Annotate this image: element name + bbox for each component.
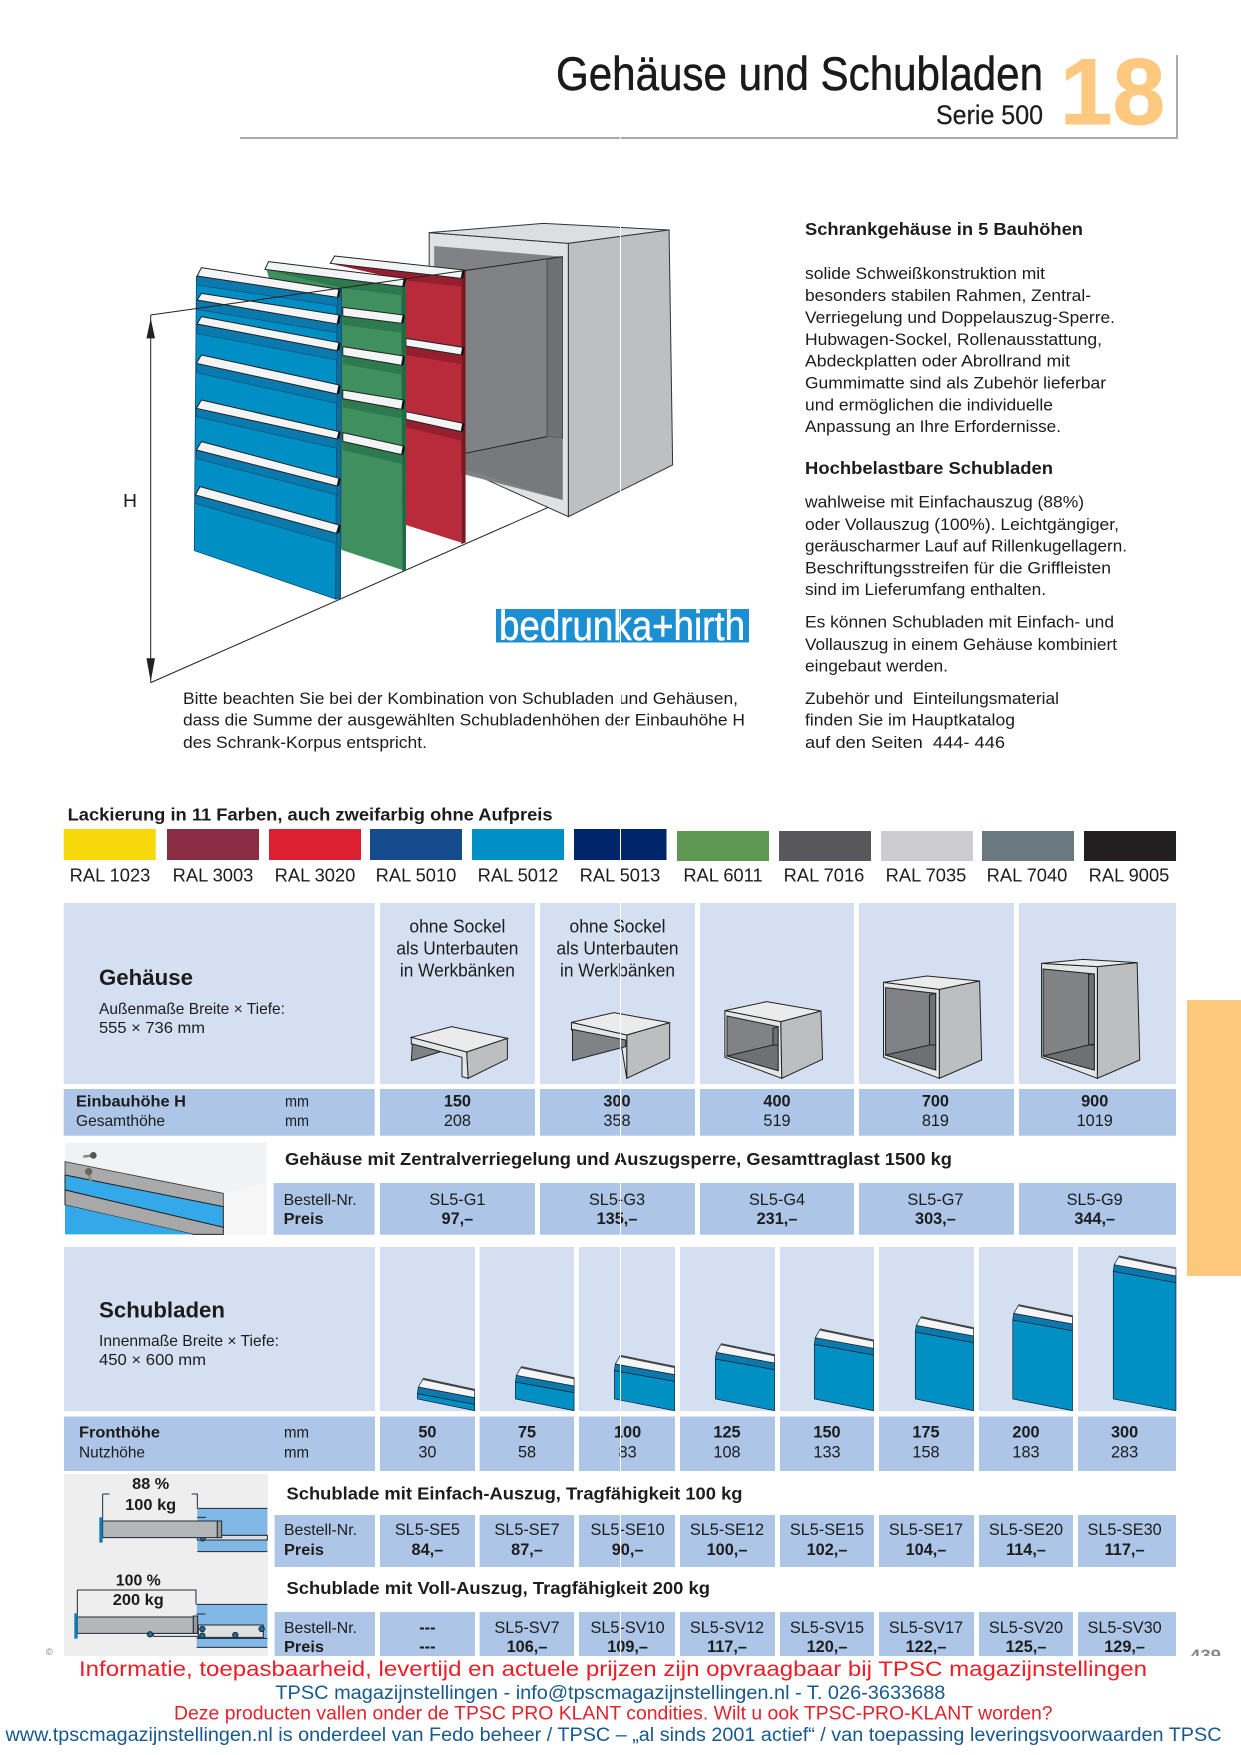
icon: housing 400	[725, 1002, 823, 1078]
note about drawer combination: des Schrank-Korpus entspricht.	[183, 733, 427, 752]
panel: drawer table	[64, 1247, 1176, 1656]
icon: drawer 175	[915, 1317, 974, 1411]
housing height row: 1019	[1077, 1112, 1113, 1130]
housing order row: SL5-G9	[1067, 1191, 1123, 1209]
label: 100 % 200 kg: 100 %	[116, 1573, 161, 1590]
housing height row: 700	[922, 1093, 949, 1111]
housing order row: 97,–	[442, 1210, 473, 1228]
drawer height row: 300	[1111, 1424, 1138, 1442]
single extension order row: Bestell-Nr.	[284, 1522, 357, 1539]
icon: housing 150	[411, 1027, 507, 1078]
housing order row: 303,–	[915, 1210, 956, 1228]
housing heading: Gehäuse	[99, 965, 193, 990]
footer text	[4, 1657, 1221, 1746]
full extension order row: 125,–	[1006, 1638, 1046, 1656]
drawer height row: 83	[619, 1444, 637, 1462]
note: no plinth 2: als Unterbauten	[556, 939, 678, 959]
single extension order row	[275, 1515, 1176, 1567]
full extension order row: SL5-SV7	[494, 1619, 560, 1637]
heading: cabinet housing: Schrankgehäuse in 5 Bauhöhen	[805, 219, 1083, 239]
colour labels: RAL 7040	[987, 865, 1067, 886]
note: no plinth 2: ohne Sockel	[570, 917, 666, 937]
housing height row: 208	[444, 1112, 471, 1130]
icon: drawer 300	[1113, 1256, 1176, 1411]
housing height row: mm	[285, 1094, 309, 1111]
full extension order row: SL5-SV15	[790, 1619, 864, 1637]
drawer height row: 158	[912, 1444, 940, 1462]
single extension order row: 104,–	[906, 1541, 946, 1559]
full extension order row: Bestell-Nr.	[284, 1620, 357, 1637]
full extension order row: SL5-SV30	[1087, 1619, 1162, 1637]
brand logo: bedrunka+hirth	[499, 602, 745, 649]
full extension order row: SL5-SV12	[690, 1619, 764, 1637]
text: accessories reference: finden Sie im Hauptkatalog	[805, 711, 1015, 730]
single extension title: Schublade mit Einfach-Auszug, Tragfähigkeit 100 kg	[286, 1484, 742, 1504]
single extension order row: SL5-SE10	[590, 1521, 665, 1539]
single extension order row: 117,–	[1105, 1541, 1145, 1559]
text: cabinet description	[805, 264, 1115, 436]
full extension order row: 120,–	[807, 1638, 847, 1656]
title: Gehäuse und Schubladen	[556, 47, 1043, 100]
housing icons	[411, 959, 1140, 1078]
text: combined extensions: eingebaut werden.	[805, 656, 948, 676]
single extension order row: Preis	[284, 1542, 324, 1559]
drawer height row: 50	[418, 1424, 436, 1442]
full extension order row: 122,–	[906, 1638, 946, 1656]
blue drawer stack	[194, 268, 342, 599]
housing order row: 231,–	[757, 1210, 797, 1228]
text: drawer description: geräuscharmer Lauf auf Rillenkugellagern.	[805, 536, 1127, 556]
cabinet housing	[429, 223, 673, 517]
footer line: website: www.tpscmagazijnstellingen.nl is onderdeel van Fedo beheer / TPSC – „al sinds 2001 actief“ / van toepassing leveringsvoorwaarden TPSC	[4, 1725, 1221, 1746]
icon: housing 700	[884, 976, 982, 1078]
colour swatches	[64, 829, 1176, 861]
page number clipped: 439	[1190, 1646, 1221, 1665]
footer line: pro customer: Deze producten vallen onder de TPSC PRO KLANT condities. Wilt u ook TPSC-PRO-KLANT worden?	[174, 1704, 1053, 1724]
single extension order row: SL5-SE12	[690, 1521, 764, 1539]
single extension order row: SL5-SE15	[790, 1521, 864, 1539]
single extension order row: SL5-SE30	[1087, 1521, 1162, 1539]
description column	[804, 219, 1127, 752]
drawer height row: Nutzhöhe	[79, 1445, 145, 1462]
housing order row: 344,–	[1074, 1210, 1115, 1228]
note: no plinth 1	[396, 917, 518, 981]
icon: drawer 200	[1013, 1305, 1072, 1411]
photo: lock detail	[65, 1143, 267, 1234]
text: drawer description: oder Vollauszug (100%). Leichtgängiger,	[805, 515, 1119, 534]
housing height row: 358	[603, 1112, 631, 1130]
text: accessories reference	[805, 689, 1059, 752]
housing height row: 519	[763, 1112, 791, 1130]
text: drawer description	[804, 493, 1127, 599]
note: no plinth 1: ohne Sockel	[409, 917, 505, 937]
note: no plinth 1: in Werkbänken	[400, 961, 515, 981]
height label: H	[123, 491, 137, 511]
drawer icons	[417, 1256, 1176, 1411]
note: no plinth 2: in Werkbänken	[560, 961, 675, 981]
single extension order row: 84,–	[412, 1541, 443, 1559]
housing order row: Preis	[284, 1211, 324, 1228]
full extension order row: ---	[419, 1638, 436, 1656]
single extension order row: SL5-SE17	[889, 1521, 963, 1539]
full extension order row: 109,–	[607, 1638, 648, 1656]
label: 88 % 100 kg: 88 %	[132, 1476, 169, 1493]
red drawer stack	[330, 256, 466, 544]
text: cabinet description: Anpassung an Ihre Erfordernisse.	[805, 417, 1061, 436]
height dimension arrow	[146, 257, 563, 683]
drawer height row: 175	[912, 1424, 940, 1442]
colour labels: RAL 3003	[173, 865, 253, 886]
full extension order row: 117,–	[707, 1638, 747, 1656]
text: accessories reference: auf den Seiten 444- 446	[805, 733, 1005, 752]
drawer inner dimensions: 450 × 600 mm	[99, 1352, 206, 1369]
housing header cells	[64, 903, 1176, 1084]
icon: housing 300	[571, 1013, 670, 1078]
housing height row: 900	[1081, 1093, 1108, 1111]
colour labels: RAL 1023	[70, 865, 150, 886]
panel: housing table	[64, 903, 1176, 1235]
text: cabinet description: Gummimatte sind als Zubehör lieferbar	[805, 374, 1106, 392]
drawer inner dimensions: Innenmaße Breite × Tiefe:	[99, 1333, 279, 1350]
palette heading: Lackierung in 11 Farben, auch zweifarbig ohne Aufpreis	[68, 805, 553, 825]
full extension order row: SL5-SV10	[590, 1619, 665, 1637]
drawer height row: mm	[284, 1425, 309, 1442]
housing outer dimensions: Außenmaße Breite × Tiefe:	[99, 1001, 285, 1018]
drawer height row: 133	[813, 1444, 841, 1462]
diagram: drawer extension	[64, 1474, 268, 1656]
colour labels: RAL 7016	[784, 865, 864, 886]
housing order row: SL5-G1	[429, 1191, 485, 1209]
colour palette	[64, 805, 1176, 886]
chapter number: 18	[1060, 39, 1165, 144]
colour labels: RAL 7035	[886, 865, 966, 886]
drawer height row: mm	[284, 1445, 309, 1462]
drawer height row: 30	[418, 1444, 436, 1462]
text: cabinet description: solide Schweißkonstruktion mit	[805, 264, 1045, 283]
subtitle: Serie 500	[936, 100, 1043, 130]
drawer height row: Fronthöhe	[79, 1425, 160, 1442]
housing outer dimensions: 555 × 736 mm	[99, 1020, 205, 1037]
drawer height row: 100	[614, 1424, 641, 1442]
note: no plinth 1: als Unterbauten	[396, 939, 518, 959]
drawer height row: 125	[713, 1424, 741, 1442]
colour labels: RAL 3020	[275, 865, 355, 886]
icon: drawer 50	[417, 1378, 475, 1411]
full extension title: Schublade mit Voll-Auszug, Tragfähigkeit 200 kg	[286, 1578, 710, 1598]
housing order row	[274, 1183, 1176, 1235]
drawer height row: 75	[518, 1424, 536, 1442]
diagram: full extension 100 %	[74, 1590, 267, 1647]
drawer header cells	[64, 1247, 1176, 1411]
label: 100 % 200 kg	[113, 1573, 164, 1609]
housing height row: 300	[603, 1093, 631, 1111]
footer band	[0, 1656, 1241, 1755]
dimension line lower	[151, 502, 561, 683]
drawer height row: 183	[1012, 1444, 1040, 1462]
colour labels: RAL 5010	[376, 865, 456, 886]
full extension order row	[275, 1612, 1176, 1656]
single extension order row: 87,–	[511, 1541, 543, 1559]
text: drawer description: sind im Lieferumfang enthalten.	[805, 580, 1046, 599]
label: 88 % 100 kg: 100 kg	[125, 1497, 176, 1514]
drawer height row: 200	[1012, 1424, 1040, 1442]
housing height row: 819	[922, 1112, 949, 1130]
housing order row: SL5-G7	[907, 1191, 963, 1209]
illustration: cabinet with drawers	[146, 223, 673, 683]
note about drawer combination: dass die Summe der ausgewählten Schubladenhöhen der Einbauhöhe H	[183, 711, 745, 730]
text: drawer description: wahlweise mit Einfachauszug (88%)	[804, 493, 1084, 512]
housing section title: Gehäuse mit Zentralverriegelung und Auszugsperre, Gesamttraglast 1500 kg	[285, 1149, 952, 1169]
heading: drawers: Hochbelastbare Schubladen	[805, 458, 1053, 478]
icon: housing 900	[1042, 959, 1140, 1078]
drawer height row: 150	[813, 1424, 841, 1442]
footer line: information notice: Informatie, toepasbaarheid, levertijd en actuele prijzen zijn opvraagbaar bij TPSC magazijnstellingen	[79, 1657, 1147, 1681]
housing outer dimensions	[99, 1001, 285, 1037]
green drawer stack	[265, 262, 406, 572]
text: combined extensions: Vollauszug in einem Gehäuse kombiniert	[805, 635, 1117, 654]
housing order row: SL5-G4	[749, 1191, 805, 1209]
single extension order row: SL5-SE20	[989, 1521, 1063, 1539]
full extension order row: Preis	[284, 1639, 324, 1656]
housing order row: 135,–	[597, 1210, 637, 1228]
full extension order row: 106,–	[507, 1638, 547, 1656]
drawer height row	[64, 1416, 1176, 1471]
diagram: single extension 88 %	[99, 1494, 267, 1552]
colour labels: RAL 5012	[478, 865, 558, 886]
single extension order row: 100,–	[707, 1541, 747, 1559]
drawer height row: 108	[713, 1444, 741, 1462]
icon: drawer 75	[515, 1367, 574, 1411]
note about drawer combination	[183, 689, 745, 752]
single extension order row: SL5-SE7	[494, 1521, 560, 1539]
text: cabinet description: Verriegelung und Doppelauszug-Sperre.	[805, 308, 1115, 327]
label: 88 % 100 kg	[125, 1476, 176, 1514]
single extension order row: 114,–	[1006, 1541, 1046, 1559]
page header	[240, 39, 1177, 144]
housing height row: 400	[763, 1093, 791, 1111]
text: cabinet description: und ermöglichen die individuelle	[805, 396, 1053, 414]
full extension order row: SL5-SV17	[889, 1619, 963, 1637]
single extension order row: 102,–	[807, 1541, 847, 1559]
orange side tab	[1187, 1000, 1241, 1276]
note about drawer combination: Bitte beachten Sie bei der Kombination von Schubladen und Gehäusen,	[183, 689, 738, 708]
housing height row	[64, 1089, 1176, 1136]
text: drawer description: Beschriftungsstreifen für die Griffleisten	[805, 558, 1111, 578]
housing height row: mm	[285, 1113, 309, 1130]
housing height row: Einbauhöhe H	[76, 1094, 186, 1111]
text: cabinet description: Abdeckplatten oder Abrollrand mit	[805, 352, 1070, 370]
text: combined extensions: Es können Schubladen mit Einfach- und	[805, 613, 1114, 632]
drawer height row: 283	[1111, 1444, 1138, 1462]
full extension order row: 129,–	[1104, 1638, 1145, 1656]
single extension order row: 90,–	[612, 1541, 643, 1559]
drawer heading: Schubladen	[99, 1298, 225, 1323]
side imprint clipped: ©	[46, 1647, 53, 1657]
drawer inner dimensions	[99, 1333, 279, 1369]
icon: drawer 150	[814, 1329, 874, 1411]
footer line: contact: TPSC magazijnstellingen - info@tpscmagazijnstellingen.nl - T. 026-3633688	[275, 1683, 945, 1704]
text: cabinet description: besonders stabilen Rahmen, Zentral-	[805, 286, 1091, 305]
text: cabinet description: Hubwagen-Sockel, Rollenausstattung,	[805, 330, 1102, 349]
colour labels: RAL 6011	[683, 865, 763, 886]
icon: drawer 125	[715, 1344, 775, 1411]
text: accessories reference: Zubehör und Einteilungsmaterial	[805, 689, 1059, 708]
colour labels: RAL 5013	[580, 865, 660, 886]
housing height row: 150	[444, 1093, 471, 1111]
single extension order row: SL5-SE5	[395, 1521, 460, 1539]
drawer height row: 58	[518, 1444, 536, 1462]
colour labels	[70, 865, 1169, 886]
icon: drawer 100	[614, 1355, 675, 1411]
colour labels: RAL 9005	[1089, 865, 1169, 886]
header rule	[240, 55, 1177, 138]
housing order row: Bestell-Nr.	[284, 1192, 357, 1209]
note: no plinth 2	[556, 917, 678, 981]
text: combined extensions	[805, 613, 1117, 676]
housing height row: Gesamthöhe	[76, 1113, 165, 1130]
housing order row: SL5-G3	[589, 1191, 645, 1209]
label: 100 % 200 kg: 200 kg	[113, 1592, 164, 1609]
full extension order row: ---	[419, 1619, 436, 1637]
full extension order row: SL5-SV20	[989, 1619, 1063, 1637]
